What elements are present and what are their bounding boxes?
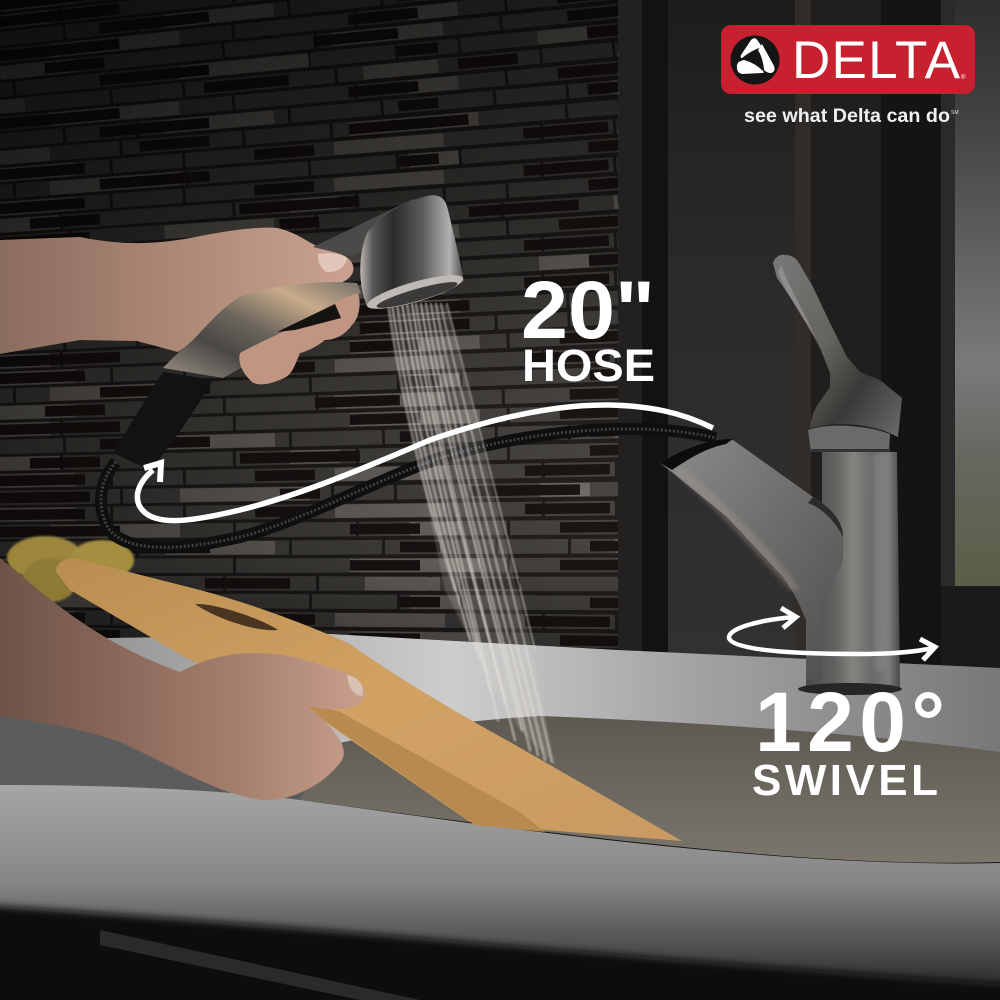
upper arm and hand [0, 228, 353, 354]
spout light band [674, 466, 800, 590]
collar dark band [811, 449, 890, 452]
lower fingers [239, 293, 360, 384]
logo: Delta [721, 25, 975, 127]
arrow: hose length [137, 405, 713, 521]
faucet handle [773, 255, 902, 437]
panel: left counter shadow [0, 712, 330, 805]
spray trigger [277, 304, 341, 332]
panel: faucet [660, 255, 902, 695]
logo emblem [730, 36, 780, 84]
spray head nozzles [375, 278, 459, 312]
spray head [360, 195, 466, 315]
faucet collar [808, 426, 890, 452]
panel: cabinet strip [100, 930, 420, 1000]
tagline service mark: SM [951, 110, 958, 116]
cutting board [56, 559, 682, 841]
hose [101, 429, 716, 547]
panel: dark cabinet below counter [0, 905, 1000, 1000]
spray wand neck [313, 199, 430, 256]
spray head face [364, 269, 466, 315]
panel: yellow lemons behind the board [7, 536, 134, 602]
arrow: swivel [729, 608, 935, 660]
faucet column [806, 452, 900, 687]
lower thumb nail [347, 675, 363, 696]
spray wand body [163, 282, 361, 378]
faucet base ring [798, 683, 902, 695]
black hose connector [113, 372, 213, 470]
board hand hole [195, 604, 278, 630]
logo red badge [721, 25, 975, 94]
faucet spout [660, 440, 843, 680]
callout: 20 inch hose: HOSE [522, 340, 655, 391]
lower arm and hand [0, 558, 365, 800]
water spray [388, 304, 555, 765]
logo registered mark: ® [961, 74, 966, 81]
panel: front counter [0, 785, 1000, 1000]
thumb nail [318, 253, 347, 272]
spout opening [660, 439, 733, 470]
panel: window frame background [618, 0, 1000, 670]
callout: 120 degree swivel: 120° [755, 675, 945, 769]
spout dark knob [808, 497, 843, 537]
callout: 20 inch hose: 20" [521, 265, 655, 356]
panel: mosaic tile backsplash [0, 0, 618, 660]
tagline: see what Delta can do [744, 106, 950, 127]
logo wordmark: DELTA [792, 31, 961, 90]
panel: sink basin [300, 716, 1000, 863]
panel: back counter surface [0, 634, 1000, 800]
faucet column highlight [873, 455, 887, 670]
board lower edge [295, 700, 545, 832]
callout: 120 degree swivel: SWIVEL [752, 756, 938, 805]
handle lever highlight [778, 265, 828, 368]
